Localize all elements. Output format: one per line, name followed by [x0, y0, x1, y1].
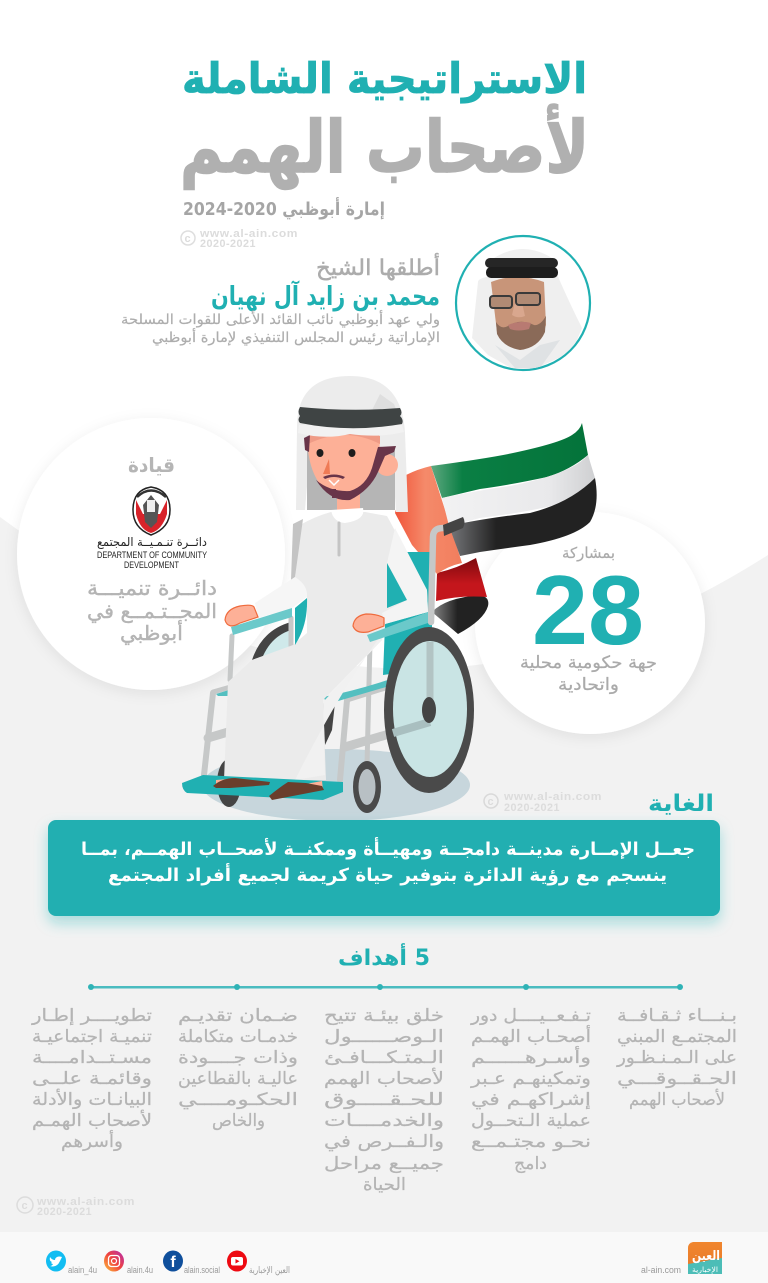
goal 3: للحـقــــوق	[324, 1090, 444, 1110]
launcher text: ولي عهد أبوظبي نائب القائد الأعلى للقوات المسلحة	[121, 310, 440, 328]
goal 3	[324, 1006, 444, 1195]
goal 1: المجتمـع المبني	[617, 1027, 737, 1047]
title: الاستراتيجية الشاملة	[182, 54, 587, 104]
main wheel	[384, 627, 474, 793]
footer: alain_4u	[68, 1265, 97, 1275]
watermark: www.al-ain.com	[503, 791, 602, 803]
title: إمارة أبوظبي 2020-2024	[183, 197, 385, 220]
goal 4: والخاص	[212, 1111, 265, 1131]
footer: alain.4u	[127, 1265, 153, 1275]
goal 1: الحـقــوقـــي	[617, 1069, 737, 1089]
goal 5: تنميـة اجتماعيـة	[32, 1027, 152, 1047]
goal 3: الحياة	[363, 1175, 406, 1195]
goal 1: بـنـــاء ثـقـافــة	[617, 1006, 737, 1026]
department name: دائــرة تنميـــة	[87, 576, 217, 600]
goal 3: خلق بيئـة تتيح	[324, 1006, 444, 1026]
panel: goal statement: جعــل الإمــارة مدينــة دامجــة ومهيــأة وممكنــة لأصحــاب الهمــم، بمــا	[81, 837, 695, 860]
footer	[0, 1232, 768, 1283]
goal 3: جميــع مراحل	[324, 1154, 444, 1174]
icon: facebook: f	[170, 1254, 176, 1271]
footer: alain.social	[184, 1265, 220, 1275]
title: لأصحاب الهمم	[180, 103, 589, 190]
watermark: 2020-2021	[37, 1206, 92, 1218]
hands	[225, 605, 258, 626]
sandals	[213, 778, 324, 800]
goal 2: وتمكينهـم عـبر	[470, 1069, 591, 1089]
front wheel	[353, 761, 381, 813]
watermark: c	[488, 796, 494, 808]
goal 3: والخدمــــات	[324, 1111, 444, 1131]
icon: facebook	[163, 1250, 183, 1272]
goal 2: أصحـاب الهمـم	[471, 1025, 591, 1047]
heading: five goals: 5 أهداف	[338, 942, 430, 971]
panel: participants circle	[475, 512, 705, 734]
logo: الإخبارية	[692, 1266, 718, 1274]
heading: leadership: قيادة	[128, 453, 175, 477]
goal 2: وأسـرهــــــم	[471, 1046, 591, 1068]
watermark	[181, 228, 298, 250]
watermark: 2020-2021	[200, 238, 256, 250]
panel: participants circle: واتحادية	[558, 675, 619, 695]
watermark: c	[184, 233, 191, 245]
goal 4: خدمـات متكاملة	[178, 1027, 298, 1047]
goal 5: تطويــــر إطـار	[31, 1006, 152, 1026]
logo: العين	[692, 1249, 720, 1264]
panel: participants circle: جهة حكومية محلية	[520, 653, 657, 673]
right sleeve	[382, 528, 428, 624]
watermark: www.al-ain.com	[36, 1196, 135, 1208]
department logotype: DEPARTMENT OF COMMUNITY	[97, 550, 208, 561]
goal 3: لأصحاب الهمم	[324, 1068, 444, 1089]
launcher text: الإماراتية رئيس المجلس التنفيذي لإمارة أبوظبي	[152, 328, 440, 346]
panel: goal statement	[48, 820, 720, 916]
illustration: man in wheelchair with flag	[182, 376, 597, 821]
armrests	[295, 598, 307, 645]
footrest	[182, 775, 343, 800]
goal 4: الحكـومــــي	[178, 1090, 298, 1110]
teal gap under arm	[387, 563, 407, 608]
goal 4: عاليـة بالقطاعين	[178, 1069, 298, 1089]
goal 5: لأصحاب الهمـم	[32, 1110, 152, 1131]
goal 4: ضـمان تقديـم	[178, 1006, 298, 1026]
goal 1: على الـمـنـظـور	[616, 1048, 737, 1068]
department name: أبوظبي	[120, 620, 183, 646]
panel: leadership circle	[17, 418, 285, 690]
head	[296, 376, 408, 555]
icon: instagram	[104, 1250, 124, 1272]
goal 3: والـفــرص في	[324, 1132, 444, 1152]
panel: goal statement: ينسجم مع رؤية الدائرة بتوفير حياة كريمة لجميع أفراد المجتمع	[108, 863, 667, 886]
department name: المجــتـمــع في	[87, 599, 217, 624]
heading: goal: الغاية	[648, 791, 714, 817]
footer: al-ain.com	[641, 1265, 681, 1275]
goal 5: وقائمـة علــى	[32, 1069, 152, 1089]
panel: participants circle: بمشاركة	[562, 544, 615, 562]
icon: emblem	[133, 487, 170, 535]
goal 5	[31, 1006, 152, 1152]
watermark	[484, 791, 602, 814]
logo	[688, 1242, 722, 1274]
watermark: 2020-2021	[504, 802, 560, 814]
goal 2: عملية الـتحــول	[471, 1111, 591, 1131]
goal 5: وأسرهم	[61, 1130, 123, 1152]
watermark: www.al-ain.com	[199, 228, 298, 240]
goal 2: نحـو مجتـمــع	[471, 1132, 591, 1152]
left sleeve shade	[291, 519, 303, 580]
department name	[87, 576, 217, 646]
goal 2: تـفـعــيــــل دور	[470, 1006, 591, 1026]
goal 2: دامج	[514, 1154, 547, 1174]
goal 4: وذات جــــودة	[178, 1048, 298, 1068]
robe	[224, 512, 428, 780]
launcher text: أطلقها الشيخ	[316, 253, 440, 281]
icon: youtube	[227, 1250, 247, 1272]
ground shadow	[202, 749, 470, 821]
goal 5: مسـتــدامــــة	[32, 1048, 152, 1068]
department logotype: دائــرة تنـمـيــة المجتمع	[97, 535, 207, 550]
rear wheel	[217, 622, 291, 807]
chair frame	[204, 528, 443, 780]
goal 1	[616, 1006, 737, 1110]
timeline	[88, 984, 683, 990]
icon: UAE flag	[395, 423, 597, 634]
chair back	[383, 552, 432, 675]
goal 4	[178, 1006, 298, 1131]
left sleeve	[255, 577, 307, 618]
goal 2: إشراكهـم في	[471, 1090, 591, 1110]
goal 3: الـوصــــــول	[324, 1027, 444, 1047]
title	[180, 54, 589, 220]
number 28: 28	[532, 555, 644, 665]
department logotype	[97, 535, 208, 571]
goal 1: لأصحاب الهمم	[629, 1089, 725, 1110]
chair handle	[443, 517, 464, 536]
launcher text: محمد بن زايد آل نهيان	[211, 280, 440, 312]
goal 3: الـمتـكـــافـئ	[324, 1048, 444, 1068]
leg shadow	[323, 703, 335, 745]
footer: العين الإخبارية	[249, 1266, 290, 1276]
portrait	[456, 236, 590, 372]
goal 2	[470, 1006, 591, 1174]
watermark	[17, 1196, 135, 1218]
launcher text	[121, 253, 440, 346]
icon: twitter	[46, 1250, 66, 1272]
goal 5: البيانـات والأدلة	[32, 1089, 152, 1110]
department logotype: DEVELOPMENT	[124, 560, 179, 571]
watermark: c	[22, 1200, 28, 1212]
seat	[323, 666, 427, 704]
